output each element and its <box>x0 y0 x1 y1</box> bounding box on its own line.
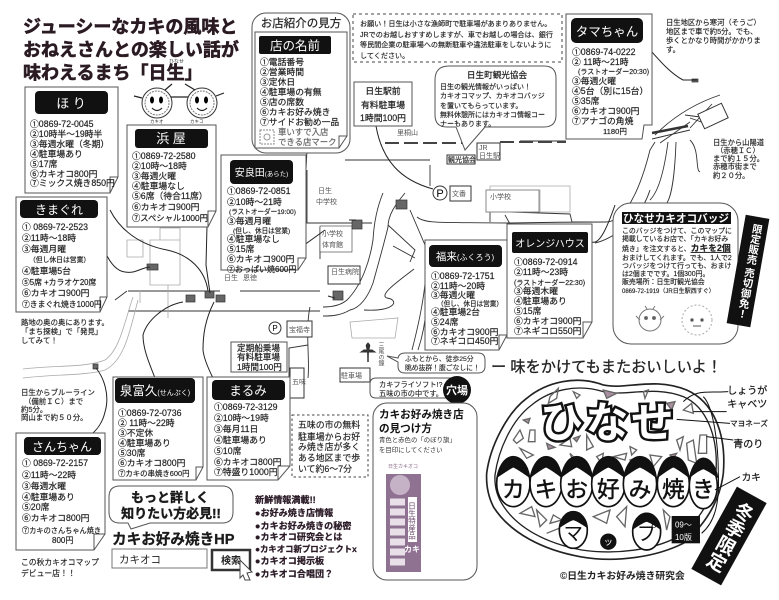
legend items: ④駐車場の有無 <box>260 86 322 97</box>
badge description: このバッジをつけて、このマップに <box>622 227 732 235</box>
details: 安良田: (ラストオーダー19:00) <box>229 207 296 216</box>
details: きまぐれ: ②11時～18時 <box>22 233 76 243</box>
building: 中学校 <box>316 186 337 206</box>
details: 安良田: (但し、休日は営業) <box>233 226 290 235</box>
building: 日生西: 日生 <box>224 273 238 282</box>
icon: badge mascot 1 <box>636 306 664 331</box>
icon: wheelchair mark <box>260 130 274 144</box>
details: ほり: ①0869-72-0045 <box>30 119 94 129</box>
panel: カキお好み焼き店の見つけ方 <box>373 403 477 580</box>
building: JR日生駅 <box>477 143 500 160</box>
title: 味わえるまち「日生」 <box>23 63 202 83</box>
details: まるみ: ②10時～19時 <box>214 413 269 423</box>
legend items: ②営業時間 <box>260 66 304 77</box>
heading: 安良田: 安良田(あらた) <box>235 166 288 179</box>
details: まるみ: ⑤10席 <box>214 446 242 456</box>
search box <box>112 549 207 568</box>
badge description: おまけしてくれます。でも、1人で2 <box>622 254 732 262</box>
egg row: カキお好み焼き: お <box>565 476 588 502</box>
details: タマちゃん: ② 11時～21時 <box>572 57 629 67</box>
mascots: カキオ and カキコ <box>134 84 224 125</box>
details: 泉富久: ⑦カキの串焼き600円 <box>118 469 189 478</box>
notice: parking request <box>353 14 562 62</box>
egg row: マップ: マ <box>564 524 583 545</box>
building: 定期船 <box>269 321 312 337</box>
building: 日生西: 恩徳 <box>243 273 257 282</box>
badge description: 焼き」を注文すると、カキを2個 <box>622 243 731 253</box>
note: この秋デビュー: この秋カキオコマップ <box>21 557 99 567</box>
illustration: flag: 日生カキオコ <box>388 463 418 470</box>
details: 浜屋: ④駐車場なし <box>132 180 185 191</box>
panel: まるみ <box>207 377 290 480</box>
details: 浜屋: ①0869-72-2580 <box>132 151 196 161</box>
egg row: カキお好み焼き: 好 <box>597 476 620 502</box>
legend note: wheelchair: できる店マーク <box>278 137 336 147</box>
shop markers <box>93 79 728 369</box>
leader lines from shops to the map <box>88 42 697 437</box>
details: きまぐれ: （但し休日は営業） <box>29 255 90 264</box>
heading: ひなせ: ひなせ <box>540 399 676 447</box>
panel: 定期船乗場 parking: 定期船乗場 <box>237 342 280 353</box>
notice: parking request: JRでのお越しおすすめしますが、車でお越しの場合は、銀行 <box>360 30 553 39</box>
details: さんちゃん: ②11時～22時 <box>22 470 76 480</box>
details: 浜屋: ②10時～18時 <box>132 161 187 171</box>
heading: ほり: ほ り <box>56 96 86 111</box>
topping labels: カキ <box>742 473 761 484</box>
note: 路地の奥: 路地の奥の奥にあります。 <box>21 318 109 327</box>
egg row: マップ <box>559 512 661 550</box>
details: オレンジハウス: ⑤15席 <box>514 306 542 316</box>
note: 山陽道 distance: 赤穂市街まで <box>713 162 757 171</box>
panel: ほり <box>25 87 118 193</box>
egg row: マップ: プ <box>637 523 657 545</box>
description: を目印にしてください <box>379 445 443 454</box>
details: ほり: ⑦ミックス焼き850円 <box>30 178 115 188</box>
callout: カキフライソフト: カキフライソフト!? <box>379 380 442 389</box>
details: 安良田: ①0869-72-0851 <box>227 186 291 196</box>
badge description: 0869-72-1919（JR日生駅西すぐ） <box>622 287 715 295</box>
egg row: カキお好み焼き: き <box>692 476 715 502</box>
badge description: つバッジをつけて行っても、おまけ <box>622 261 731 270</box>
details: 福来: ③毎週火曜 <box>431 289 475 300</box>
building: 日生小学校: 体育館 <box>322 240 343 249</box>
heading: きまぐれ: きまぐれ <box>35 203 83 217</box>
notice: 五味の市: ある地区まで歩 <box>298 452 360 463</box>
details: きまぐれ: ① 0869-72-2523 <box>22 222 88 232</box>
mascots: カキオ and カキコ: カキオ <box>150 119 164 125</box>
icon: badge mascot 2 <box>682 305 712 335</box>
note: 山陽道 distance: （赤穂ＩＣ） <box>716 146 760 155</box>
callout: カキフライソフト: 五味の市の中です。 <box>379 389 443 398</box>
building: 観光協会: 観光協会 <box>448 155 476 164</box>
notice: 五味の市 <box>292 415 368 477</box>
details: タマちゃん: ⑦アナゴの角焼 <box>572 115 634 126</box>
panel: 定期船乗場 parking: 1時間100円 <box>237 362 282 372</box>
details: 泉富久: ⑤30席 <box>118 448 146 458</box>
badge description: 掲載しているお店で、「カキお好み <box>622 234 728 243</box>
building: 小学校 <box>486 190 539 212</box>
badge description: は2個までです。1個300円。 <box>622 269 709 278</box>
notice: 五味の市: み焼き店が多く <box>298 441 360 452</box>
building: 日生小学校 <box>320 226 352 252</box>
details: オレンジハウス: ⑥カキオコ900円 <box>514 316 582 326</box>
panel: 浜屋 <box>127 125 216 227</box>
details: タマちゃん: ①0869-74-0222 <box>572 47 636 57</box>
panel: タマちゃん <box>566 14 652 139</box>
building: 日生小学校: 小学校 <box>322 229 343 238</box>
heading: の見つけ方 <box>379 422 432 435</box>
heading: ひなせカキオコバッジ: ひなせカキオコバッジ <box>623 213 729 225</box>
panel: ひなせカキオコバッジ <box>613 203 738 344</box>
topping labels: 青のり <box>733 437 763 450</box>
callout: カキフライソフト <box>370 376 471 404</box>
legend items: ⑤店の席数 <box>260 96 304 107</box>
callout: 日生町観光協会: 日生町観光協会 <box>467 69 527 80</box>
notice: 五味の市: いて約6～7分 <box>298 463 352 474</box>
details: ほり: ④駐車場あり <box>30 148 83 159</box>
callout: もっと詳しく <box>109 486 233 529</box>
callout: もっと詳しく: もっと詳しく <box>131 490 209 505</box>
panel: きまぐれ <box>16 197 107 312</box>
callout: 日生町観光協会: 無料休憩所にはカキオコ情報コー <box>440 110 545 119</box>
title: おねえさんとの楽しい話が <box>23 39 239 60</box>
egg row: カキお好み焼き: み <box>629 476 651 502</box>
panel: オレンジハウス <box>507 224 592 338</box>
egg row: カキお好み焼き <box>497 457 717 509</box>
details: オレンジハウス: ⑦ネギコロ550円 <box>514 326 582 336</box>
note: 路地の奥: 「まち探検」で「発見」 <box>21 327 102 336</box>
details: 浜屋: ⑦スペシャル1000円 <box>132 213 208 223</box>
panel: お店紹介の見方 <box>252 13 350 153</box>
building: 定期船: P <box>272 324 278 333</box>
building: 定期船: 宝福寺 <box>289 325 310 334</box>
label: 里桐山: 里桐山 <box>397 128 418 137</box>
details: 福来: ①0869-72-1751 <box>431 271 495 281</box>
panel: 安良田 <box>221 155 306 274</box>
handwritten slogan: ー 味をかけてもまたおいしいよ！ <box>491 359 722 376</box>
note: ブルーライン distance: 日生からブルーライン <box>21 388 95 397</box>
details: 福来: ②11時～20時 <box>431 281 485 291</box>
details: 福来: ⑦ネギコロ450円 <box>431 336 499 346</box>
egg row: マップ: ッ <box>604 537 613 547</box>
details: タマちゃん: ③毎週火曜 <box>572 75 616 86</box>
legend items: ⑥カキお好み焼き <box>260 106 330 117</box>
details: タマちゃん: (ラストオーダー20:30) <box>578 67 649 76</box>
notice: parking request: お願い！日生は小さな漁師町で駐車場があまりありません。 <box>360 19 551 28</box>
icon: bell at 三尾: 三尾の鐘 <box>377 342 384 366</box>
details: まるみ: ③毎月11日 <box>214 423 258 434</box>
heading: 泉富久: 泉富久(せんぷく) <box>120 383 190 398</box>
legend items: ⑦サイドお勧め一品 <box>260 116 339 127</box>
note: この秋デビュー: デビュー店！！ <box>21 568 76 578</box>
panel: さんちゃん <box>16 433 105 550</box>
legend items: ③定休日 <box>260 76 295 87</box>
callout: 日生町観光協会: を置いてもらっています。 <box>440 102 522 110</box>
heading: カキお好み焼き店 <box>379 408 464 421</box>
list: 新鮮情報満載: ●お好み焼き店情報 <box>255 507 333 518</box>
panel: 日生駅前 parking: 有料駐車場 <box>361 99 405 110</box>
edition label <box>672 516 700 543</box>
building: 中学校: 日生 <box>318 186 332 195</box>
details: きまぐれ: ④駐車場5台 <box>22 265 71 276</box>
buildings: 五味の市 <box>290 368 370 398</box>
topping leader lines <box>677 392 740 533</box>
egg row: カキお好み焼き: 焼 <box>662 476 685 502</box>
note: ブルーライン distance: 約5分。 <box>21 405 47 414</box>
note: 寒河 distance: 地区まで車で約5分。でも、 <box>666 27 757 36</box>
details: ほり: ⑥カキオコ800円 <box>30 169 98 179</box>
toppings <box>513 388 707 533</box>
building: 文番: 文番 <box>452 189 466 198</box>
title: ジューシーなカキの風味と <box>23 17 237 37</box>
details: オレンジハウス: ③毎週木曜 <box>514 285 558 296</box>
edition label: 10版 <box>675 532 692 542</box>
panel: 定期船乗場 parking: 有料駐車場 <box>237 351 280 362</box>
panel: 福来 <box>425 240 507 350</box>
callout: 日生町観光協会: ナーもあります。 <box>440 120 495 128</box>
illustration: flag <box>386 463 421 572</box>
illustration: flag: 日生特産品 <box>407 502 416 541</box>
details: 泉富久: ⑥カキオコ800円 <box>118 458 186 468</box>
badge description: 販売場所：日生町観光協会 <box>622 277 705 286</box>
building: 中学校: 中学校 <box>316 197 337 206</box>
details: 福来: ⑥カキオコ900円 <box>431 327 499 337</box>
notice: 五味の市: 五味の市の無料 <box>298 419 360 430</box>
details: オレンジハウス: ④駐車場あり <box>514 295 567 306</box>
details: さんちゃん: ① 0869-72-2157 <box>22 458 88 468</box>
illustration: okonomiyaki <box>487 380 768 559</box>
heading: まるみ: まるみ <box>229 384 267 398</box>
details: 安良田: ⑥カキオコ900円 <box>227 254 295 264</box>
list: 新鮮情報満載: ●カキオコ研究会とは <box>255 531 342 542</box>
building: 日生病院: 日生病院 <box>331 267 359 276</box>
note: 寒河 distance: す。 <box>666 45 680 54</box>
details: 浜屋: ⑥カキオコ900円 <box>132 202 200 212</box>
banner: 冬季限定: 冬季限定 <box>701 497 757 575</box>
details: 浜屋: ③毎週火曜 <box>132 170 176 181</box>
topping labels: マヨネーズ <box>730 418 768 428</box>
search button with cursor <box>212 550 252 580</box>
details: タマちゃん: ⑤35席 <box>572 96 600 106</box>
details: きまぐれ: ⑦きまぐれ焼き1000円 <box>22 300 102 309</box>
details: 安良田: ②10時～21時 <box>227 197 282 207</box>
details: ほり: ②10時半～19時半 <box>30 128 103 139</box>
title <box>23 17 239 83</box>
heading: お店紹介の見方: お店紹介の見方 <box>261 16 341 30</box>
copyright: ©日生カキお好み焼き研究会 <box>560 569 685 582</box>
icon: 穴場 badge: 穴場 <box>446 383 468 397</box>
description: 青色と赤色の「のぼり旗」 <box>379 435 456 444</box>
notice: parking request: してください。 <box>360 52 409 60</box>
parking mark: P <box>436 188 444 200</box>
details: まるみ: ①0869-72-3129 <box>214 402 278 412</box>
details: ほり: ⑤17席 <box>30 159 58 169</box>
callout: ふもとから: 眺め抜群！腹ごなしに！ <box>405 363 480 372</box>
details: 安良田: ⑦おっぱい焼600円 <box>227 265 296 274</box>
note: 山陽道 distance: まで約１５分。 <box>713 154 764 163</box>
egg row: カキお好み焼き: キ <box>535 476 557 502</box>
parking mark <box>433 186 447 200</box>
details: 安良田: ④駐車場なし <box>227 233 280 244</box>
details: 福来: ⑤24席 <box>431 317 459 327</box>
details: 福来: （但し、休日は営業） <box>437 299 503 308</box>
edition label: 09～ <box>675 520 692 529</box>
details: 浜屋: ⑤6席（待合11席） <box>132 190 208 201</box>
panel: 日生駅前 parking: 1時間100円 <box>360 113 406 123</box>
details: 泉富久: ①0869-72-0736 <box>118 408 182 418</box>
icon: bell at 三尾 <box>361 342 384 366</box>
details: 安良田: ⑤15席 <box>227 244 255 254</box>
note: 路地の奥: してみて！ <box>21 336 58 345</box>
banner: 冬季限定 <box>691 487 767 585</box>
details: さんちゃん: ⑥カキオコ800円 <box>22 513 90 523</box>
details: まるみ: ⑥カキオコ800円 <box>214 457 282 467</box>
note: ブルーライン distance: 岡山まで約５０分。 <box>21 413 88 422</box>
legend note: wheelchair: 車いすで入店 <box>278 127 328 137</box>
title: ひなせ <box>169 58 184 65</box>
details: 泉富久: ③不定休 <box>118 427 153 438</box>
note: 寒河 distance: 歩くとかなり時間がかかりま <box>666 36 761 45</box>
banner: 限定販売 売切御免: 限定販売 売切御免！ <box>734 222 763 320</box>
buildings: 五味の市: 駐車場 <box>341 371 362 380</box>
details: きまぐれ: ⑥カキオコ900円 <box>22 288 90 298</box>
details: きまぐれ: ⑤5席 +カラオケ20席 <box>22 278 97 287</box>
callout: 日生町観光協会: カキオコマップ、カキオコバッジ <box>440 92 545 100</box>
panel: 日生駅前 parking: 日生駅前 <box>365 85 401 96</box>
note: 山陽道 distance: 日生から山陽道 <box>713 138 765 147</box>
list: 新鮮情報満載: 新鮮情報満載!! <box>255 494 316 505</box>
heading: さんちゃん: さんちゃん <box>32 440 92 454</box>
search button with cursor: 検索 <box>221 554 241 567</box>
details: タマちゃん: ⑥カキオコ900円 <box>572 106 640 116</box>
details: 泉富久: ② 11時～22時 <box>118 418 175 428</box>
building: JR日生駅: JR <box>479 145 488 152</box>
list: 新鮮情報満載: ●カキオコ新プロジェクトx <box>255 544 357 554</box>
heading: オレンジハウス: オレンジハウス <box>515 238 585 250</box>
note: ブルーライン distance: （備前ＩＣ）まで <box>24 397 83 406</box>
list: 新鮮情報満載: ●カキお好み焼きの秘密 <box>255 520 351 531</box>
heading: 福来: 福来(ふくろう) <box>436 250 494 263</box>
details: さんちゃん: 800円 <box>52 536 73 545</box>
topping labels <box>727 384 768 484</box>
legend card <box>255 32 347 148</box>
details: さんちゃん: ③毎週水曜 <box>22 480 66 491</box>
callout: 日生町観光協会 <box>435 66 556 150</box>
details: オレンジハウス: ①0869-72-0914 <box>514 257 578 267</box>
details: 安良田: ③毎週月曜 <box>227 215 271 226</box>
callout: ふもとから <box>387 353 485 373</box>
panel: 定期船乗場 parking <box>231 342 287 372</box>
details: まるみ: ④駐車場あり <box>214 434 267 445</box>
search box: カキオコ <box>119 554 161 566</box>
details: 泉富久: ④駐車場あり <box>118 437 171 448</box>
details: オレンジハウス: ②11時～23時 <box>514 267 568 277</box>
building: JR日生駅: 日生駅 <box>479 151 500 160</box>
details: さんちゃん: ⑤20席 <box>22 502 50 512</box>
topping labels: しょうが <box>727 384 767 397</box>
list: 新鮮情報満載: ●カキオコ合唱団？ <box>255 568 333 579</box>
building: 日生病院 <box>328 266 360 284</box>
panel: 泉富久 <box>113 377 203 480</box>
callout: ふもとから: ふもとから、徒歩25分 <box>405 354 474 363</box>
heading: タマちゃん: タマちゃん <box>576 25 638 39</box>
illustration: flag: カキ <box>404 545 420 554</box>
callout: 日生町観光協会: 日生の観光情報がいっぱい！ <box>440 82 531 91</box>
topping labels: キャベツ <box>727 398 767 410</box>
map: roads, buildings and shop leaders <box>23 42 728 437</box>
details: さんちゃん: ④駐車場あり <box>22 491 75 502</box>
heading: カキお好み焼きHP: カキお好み焼きHP <box>112 531 235 548</box>
heading: 浜屋: 浜 屋 <box>156 131 186 146</box>
notice: parking request: 等民間企業の駐車場への無断駐車や違法駐車をしないように <box>360 40 551 49</box>
details: 福来: ④駐車場2台 <box>431 306 480 317</box>
details: さんちゃん: ⑦カキのさんちゃん焼き <box>22 526 101 535</box>
buildings: 五味の市: 五味 <box>292 377 306 386</box>
mascots: カキオ and カキコ: カキコ <box>190 119 204 125</box>
details: オレンジハウス: (ラストオーダー22:30) <box>514 278 585 287</box>
legend items: ①電話番号 <box>260 56 304 67</box>
note: 寒河 distance: 日生地区から寒河（そうご） <box>666 18 761 27</box>
details: タマちゃん: ④5台（別に15台） <box>572 85 648 96</box>
building: 小学校: 小学校 <box>490 192 511 201</box>
legend heading: 店の名前: 店の名前 <box>270 38 320 53</box>
building: 文番 <box>450 186 471 201</box>
details: ほり: ③毎週水曜（冬期） <box>30 138 109 149</box>
details: きまぐれ: ③毎週月曜 <box>22 243 66 254</box>
building: 日生西 <box>224 273 257 282</box>
note: 山陽道 distance: 約２０分。 <box>713 171 749 180</box>
callout: もっと詳しく: 知りたい方必見!! <box>121 506 221 521</box>
details: タマちゃん: 1180円 <box>603 127 627 136</box>
details: まるみ: ⑦特盛り1000円 <box>214 466 278 477</box>
egg row: カキお好み焼き: カ <box>502 476 525 502</box>
banner: 限定販売 売切御免 <box>727 215 769 327</box>
list: 新鮮情報満載: ●カキオコ掲示板 <box>255 555 324 566</box>
notice: 五味の市: 駐車場からお好 <box>298 431 360 442</box>
panel: 日生駅前 parking <box>354 82 412 126</box>
